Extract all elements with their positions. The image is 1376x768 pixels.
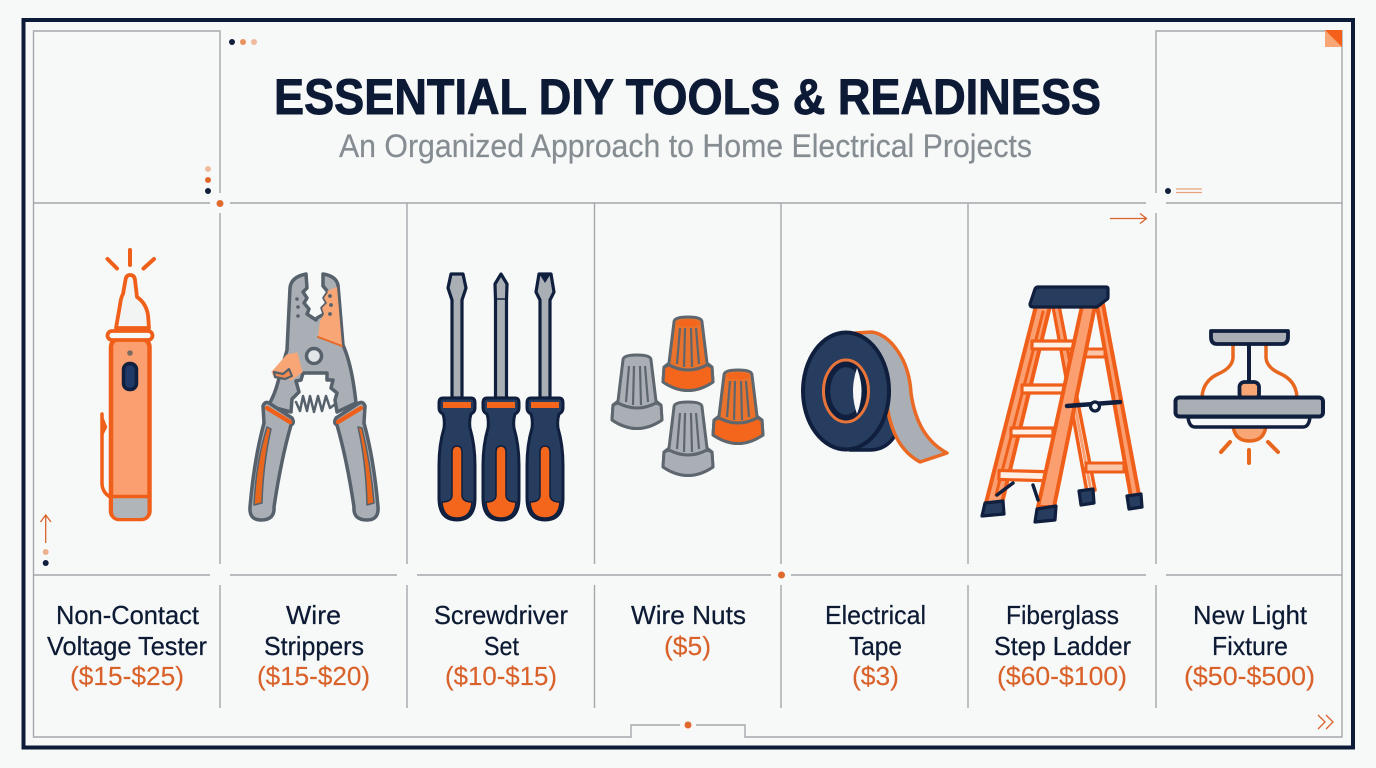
icon: step ladder	[982, 287, 1142, 522]
label: new light fixture	[1184, 600, 1315, 691]
icon: wire strippers	[250, 274, 378, 520]
icon: ceiling light	[1176, 331, 1323, 463]
label: wire nuts	[631, 600, 746, 661]
panel: new light fixture	[1176, 331, 1323, 691]
decorative dots top	[229, 39, 257, 45]
corner accent	[1325, 30, 1342, 47]
decorative dots side	[205, 166, 211, 194]
arrow up	[40, 515, 51, 543]
label: screwdriver set	[434, 600, 568, 691]
panel: screwdriver set	[434, 274, 568, 691]
torx screwdriver	[527, 274, 563, 520]
decorative dots lower left	[43, 549, 49, 566]
label: non-contact voltage tester: ($15-$25)	[70, 661, 184, 691]
label: wire nuts: ($5)	[664, 631, 711, 661]
icon: wire nuts	[612, 317, 763, 476]
title: ESSENTIAL DIY TOOLS & READINESS	[274, 69, 1101, 125]
icon: screwdrivers	[439, 274, 563, 520]
label: fiberglass step ladder: ($60-$100)	[997, 661, 1127, 691]
label: fiberglass step ladder	[994, 600, 1131, 691]
label: non-contact voltage tester: Non-Contact	[56, 600, 200, 630]
label: screwdriver set: Screwdriver	[434, 600, 568, 630]
label: electrical tape	[825, 600, 926, 691]
icon: voltage tester	[102, 250, 154, 519]
label: new light fixture: Fixture	[1212, 631, 1288, 661]
junction dot	[216, 200, 224, 207]
icon: tape roll	[803, 332, 947, 462]
label: new light fixture: New Light	[1193, 600, 1308, 630]
panel: non-contact voltage tester	[47, 250, 207, 691]
label: wire strippers: ($15-$20)	[257, 661, 370, 691]
label: new light fixture: ($50-$500)	[1184, 661, 1315, 691]
label: electrical tape: ($3)	[852, 661, 899, 691]
arrow right	[1110, 214, 1146, 224]
orange nut top	[663, 317, 713, 390]
label: wire nuts: Wire Nuts	[631, 600, 746, 630]
panel: fiberglass step ladder	[982, 287, 1142, 691]
label: fiberglass step ladder: Fiberglass	[1006, 600, 1119, 630]
label: wire strippers: Wire	[286, 600, 341, 630]
phillips screwdriver	[483, 274, 519, 520]
label: screwdriver set: Set	[484, 631, 520, 661]
label: electrical tape: Tape	[849, 631, 902, 661]
gray nut left	[612, 355, 662, 428]
bottom dot	[684, 722, 692, 728]
label: electrical tape: Electrical	[825, 600, 926, 630]
label: non-contact voltage tester	[47, 600, 207, 691]
label: fiberglass step ladder: Step Ladder	[994, 631, 1131, 661]
subtitle: An Organized Approach to Home Electrical Projects	[339, 128, 1032, 164]
label: wire strippers: Strippers	[264, 631, 364, 661]
chevrons	[1318, 715, 1333, 729]
label: wire strippers	[257, 600, 370, 691]
junction dot lower	[778, 572, 785, 578]
gray nut bottom	[663, 402, 713, 476]
panel: electrical tape	[803, 332, 947, 691]
flat screwdriver	[439, 274, 475, 520]
decorative dot and dashes	[1165, 188, 1202, 194]
orange nut right	[713, 370, 763, 444]
label: non-contact voltage tester: Voltage Tester	[47, 631, 207, 661]
panel: wire nuts	[612, 317, 763, 661]
label: screwdriver set: ($10-$15)	[445, 661, 557, 691]
panel: wire strippers	[250, 274, 378, 691]
